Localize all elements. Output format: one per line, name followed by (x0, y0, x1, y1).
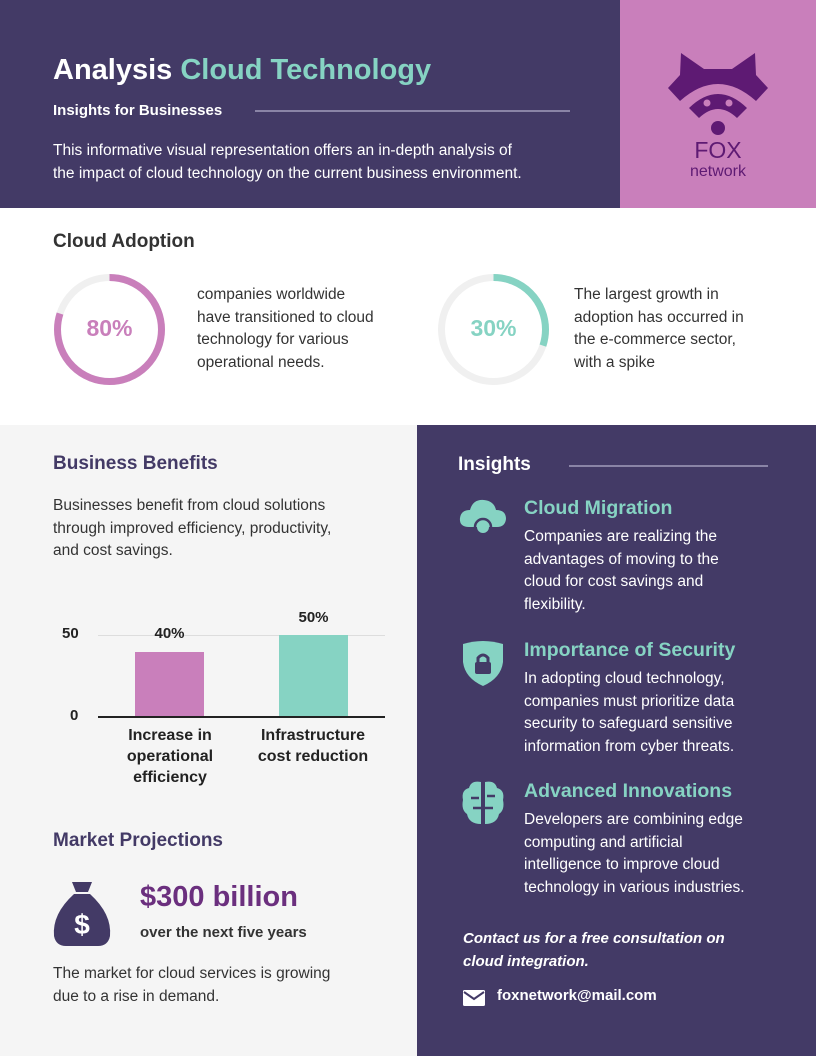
icon: shield (463, 641, 503, 686)
logo text: FOX (694, 137, 742, 163)
insight 1: Cloud Migration (524, 497, 672, 519)
intro text (53, 142, 522, 182)
icon: cloud (460, 500, 506, 533)
subtitle: Insights for Businesses (53, 102, 222, 119)
benefits text: through improved efficiency, productivity, (53, 520, 331, 536)
heading market projections: Market Projections (53, 830, 223, 851)
insight 3: Developers are combining edge (524, 811, 743, 828)
text 30% (574, 286, 744, 370)
panel: left gray: over the next five years (140, 924, 307, 941)
insight 1 (524, 497, 719, 612)
insight 2: Importance of Security (524, 639, 735, 661)
text 80% (197, 286, 374, 370)
text 80%: technology for various (197, 331, 349, 348)
insight 3 (524, 780, 745, 896)
text 30%: the e-commerce sector, (574, 331, 736, 348)
icon: brain (462, 782, 504, 824)
contact text (463, 930, 725, 970)
panel: left gray (0, 425, 417, 1056)
bar chart: 40% (154, 625, 185, 642)
insight 3: technology in various industries. (524, 878, 745, 896)
contact text: cloud integration. (463, 953, 589, 970)
heading: Cloud Adoption (53, 231, 195, 252)
insight 1: flexibility. (524, 596, 586, 612)
section: cloud adoption (53, 231, 744, 385)
logo text (690, 137, 746, 180)
insight 2: In adopting cloud technology, (524, 670, 725, 687)
email: foxnetwork@mail.com (497, 987, 657, 1004)
insight 3: Advanced Innovations (524, 780, 732, 802)
icon: money bag: $ (74, 909, 90, 940)
bar chart: 50 (62, 625, 79, 642)
panel: insights (417, 425, 816, 1056)
insight 2: information from cyber threats. (524, 738, 734, 754)
benefits text: and cost savings. (53, 542, 173, 559)
donut 80%: 80% (86, 315, 133, 341)
benefits text: Businesses benefit from cloud solutions (53, 497, 325, 514)
bar chart: 50% (298, 609, 329, 626)
intro text: This informative visual representation offers an in-depth analysis of (53, 142, 512, 159)
text 30%: adoption has occurred in (574, 308, 744, 326)
market text: due to a rise in demand. (53, 988, 219, 1004)
logo text: network (690, 163, 746, 180)
insight 1: cloud for cost savings and (524, 573, 703, 590)
logo panel (620, 0, 816, 208)
title: Analysis Cloud Technology (53, 54, 431, 86)
insight 3: computing and artificial (524, 834, 683, 850)
insight 2: security to safeguard sensitive (524, 715, 732, 732)
stat: $300 billion (140, 881, 298, 913)
insight 2: companies must prioritize data (524, 692, 734, 710)
text 80%: companies worldwide (197, 286, 345, 303)
contact text: Contact us for a free consultation on (463, 930, 725, 947)
icon: fox logo (668, 53, 768, 135)
market text: The market for cloud services is growing (53, 965, 330, 982)
insight 2 (524, 639, 736, 754)
text 30%: The largest growth in (574, 286, 719, 303)
text 80%: have transitioned to cloud (197, 308, 374, 326)
text 80%: operational needs. (197, 354, 325, 370)
text 30%: with a spike (574, 354, 655, 370)
benefits text (53, 497, 331, 559)
donut 30%: 30% (470, 315, 517, 341)
donut 30% (438, 274, 549, 385)
market text (53, 965, 330, 1004)
header panel (0, 0, 620, 208)
bar chart: Infrastructure cost reduction (258, 727, 368, 765)
insight 3: intelligence to improve cloud (524, 856, 720, 873)
insight 1: Companies are realizing the (524, 528, 717, 545)
intro text: the impact of cloud technology on the current business environment. (53, 164, 522, 182)
bar chart: 0 (70, 707, 78, 724)
donut 80% (54, 274, 165, 385)
heading business benefits: Business Benefits (53, 453, 218, 474)
heading insights: Insights (458, 454, 531, 475)
insight 1: advantages of moving to the (524, 550, 719, 568)
bar chart: Increase in operational efficiency (127, 727, 213, 786)
icon: money bag (54, 882, 110, 946)
bar chart (62, 609, 385, 786)
